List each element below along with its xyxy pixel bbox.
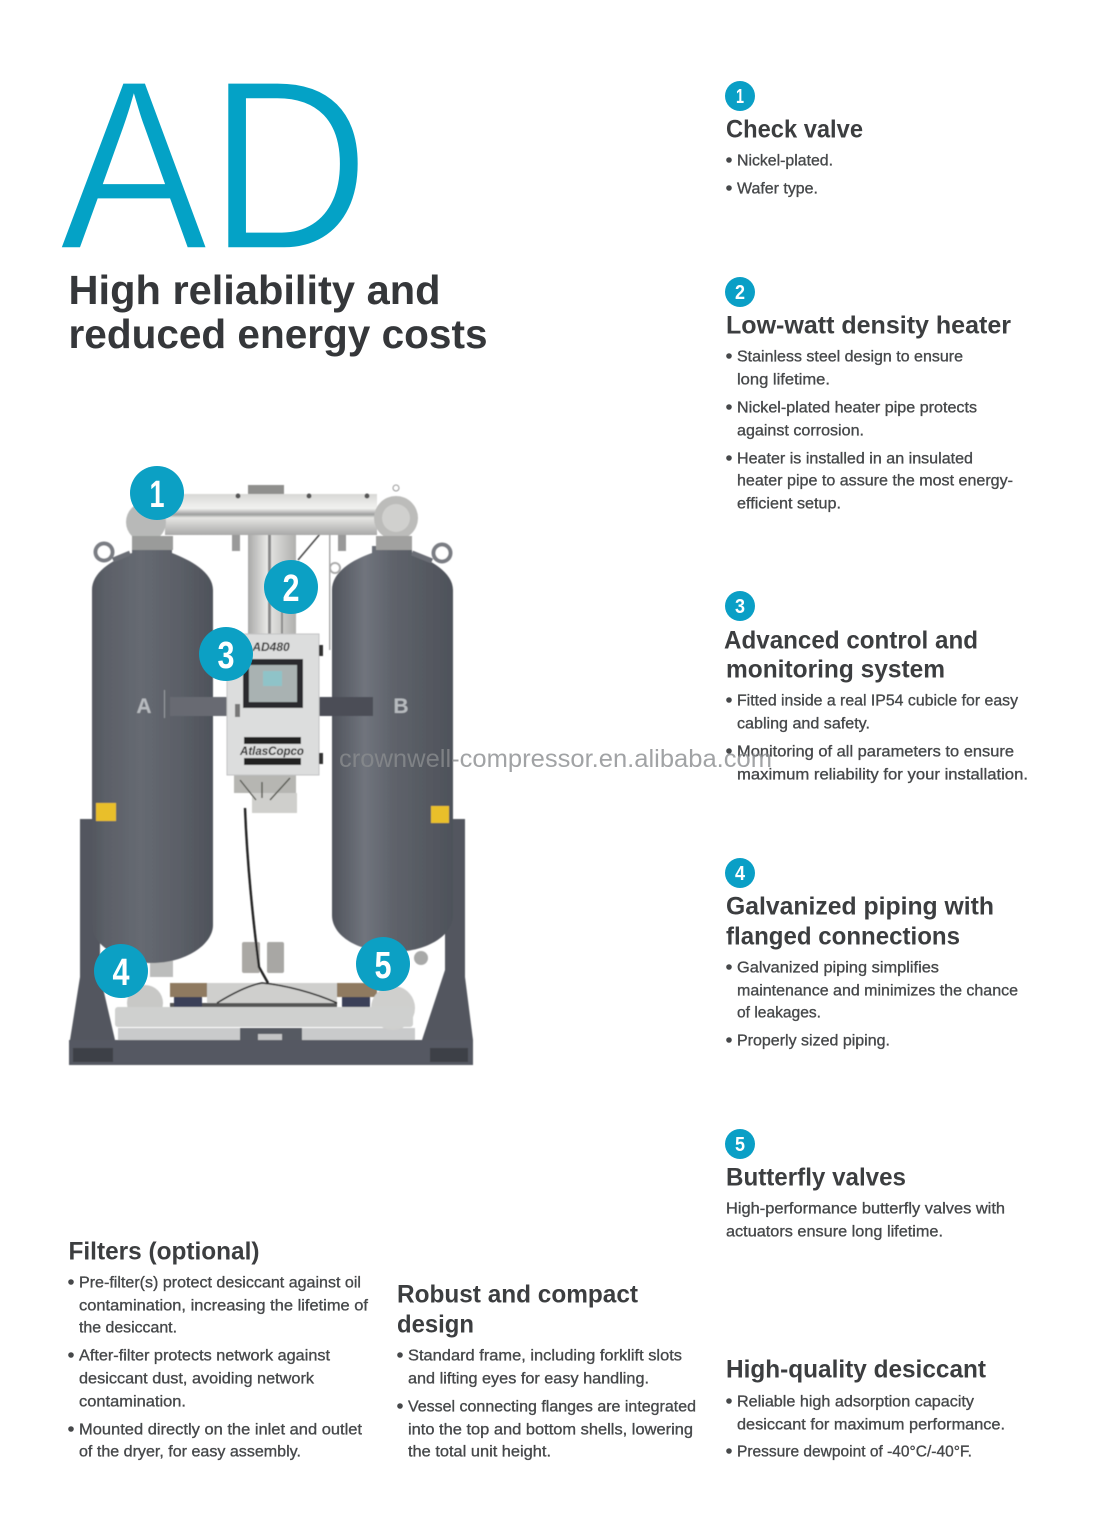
- bullet list: Pre-filter(s) protect desiccant against oil: [79, 1275, 361, 1292]
- description: actuators ensure long lifetime.: [726, 1224, 943, 1241]
- bullet list: heater pipe to assure the most energy-: [737, 473, 1013, 490]
- feature 1: check valve: [725, 81, 863, 198]
- bullet list: Stainless steel design to ensure: [737, 349, 963, 366]
- badge 2: [725, 277, 755, 307]
- bullet list: maintenance and minimizes the chance: [737, 983, 1018, 1000]
- badge 1: 1: [736, 86, 744, 108]
- bullet list: the desiccant.: [79, 1320, 177, 1337]
- bullet list: Properly sized piping.: [737, 1033, 890, 1050]
- bullet list: long lifetime.: [737, 372, 830, 389]
- bullet list: Reliable high adsorption capacity: [737, 1394, 974, 1411]
- bullet list: and lifting eyes for easy handling.: [408, 1371, 649, 1388]
- control cubicle: [227, 634, 323, 775]
- main heading: High reliability and: [68, 267, 440, 313]
- watermark: crownwell-compressor.en.alibaba.com: [339, 745, 772, 773]
- bullet list: [726, 693, 1028, 784]
- bullet list: the total unit height.: [408, 1444, 551, 1461]
- control cubicle: AD480: [251, 640, 290, 654]
- bullet list: against corrosion.: [737, 423, 864, 440]
- badge 5: 5: [735, 1134, 745, 1156]
- bullet list: contamination.: [79, 1394, 186, 1411]
- tank A: A: [136, 695, 152, 718]
- bullet list: Monitoring of all parameters to ensure: [737, 744, 1014, 761]
- control cubicle: AtlasCopco: [239, 746, 304, 758]
- heading: monitoring system: [726, 656, 945, 684]
- heading: Check valve: [726, 116, 863, 144]
- panel: high-quality desiccant: [726, 1356, 1005, 1461]
- bullet list: Fitted inside a real IP54 cubicle for easy: [737, 693, 1018, 710]
- callout 2: 2: [282, 568, 300, 610]
- bullet list: [726, 1394, 1005, 1461]
- heading: design: [397, 1310, 474, 1338]
- callout 1: [130, 466, 184, 520]
- panel: robust and compact design: [397, 1280, 696, 1461]
- tie brackets: [170, 697, 373, 716]
- bullet list: of the dryer, for easy assembly.: [79, 1444, 301, 1461]
- bullet list: Heater is installed in an insulated: [737, 451, 973, 468]
- callout 3: 3: [218, 635, 234, 677]
- main heading: [68, 267, 488, 357]
- bullet list: Vessel connecting flanges are integrated: [408, 1399, 696, 1416]
- badge 3: [725, 591, 755, 621]
- main heading: reduced energy costs: [68, 311, 488, 357]
- bullet list: Nickel-plated heater pipe protects: [737, 400, 977, 417]
- heading: Advanced control and: [724, 626, 978, 654]
- badge 4: [725, 858, 755, 888]
- panel: filters (optional): [68, 1238, 369, 1461]
- description: [726, 1201, 1005, 1241]
- heading: Robust and compact: [397, 1280, 639, 1308]
- heading: Low-watt density heater: [726, 312, 1011, 340]
- bullet list: Galvanized piping simplifies: [737, 960, 939, 977]
- bullet list: cabling and safety.: [737, 716, 870, 733]
- bottom piping: [115, 942, 415, 1030]
- bullet list: [726, 153, 833, 198]
- callout 5: 5: [374, 945, 392, 987]
- bullet list: desiccant dust, avoiding network: [79, 1371, 314, 1388]
- heading: flanged connections: [726, 922, 960, 950]
- heading: Galvanized piping with: [726, 892, 994, 920]
- bullet list: Standard frame, including forklift slots: [408, 1348, 682, 1365]
- bullet list: [726, 960, 1018, 1050]
- vertical pipes: [232, 530, 346, 650]
- feature 3: advanced control and monitoring system: [724, 591, 1028, 784]
- callout 1: 1: [150, 474, 164, 516]
- feature 2: low-watt density heater: [725, 277, 1013, 513]
- bullet list: After-filter protects network against: [79, 1348, 331, 1365]
- bullet list: Wafer type.: [737, 181, 818, 198]
- valve block under cubicle: [234, 775, 297, 813]
- feature 4: galvanized piping: [725, 858, 1018, 1050]
- bullet list: desiccant for maximum performance.: [737, 1417, 1005, 1434]
- bullet list: [726, 349, 1013, 513]
- tank B: B: [393, 695, 409, 718]
- heading: High-quality desiccant: [726, 1356, 987, 1384]
- heading: Butterfly valves: [726, 1164, 906, 1192]
- tank A: [92, 544, 213, 977]
- heading: [397, 1280, 639, 1338]
- callout 4: 4: [112, 952, 130, 994]
- bullet list: [68, 1275, 369, 1461]
- callout 5: [356, 937, 410, 991]
- badge 3: 3: [735, 596, 745, 618]
- feature 5: butterfly valves: [725, 1129, 1005, 1241]
- bullet list: Nickel-plated.: [737, 153, 833, 170]
- heading: Filters (optional): [68, 1238, 260, 1266]
- bullet list: efficient setup.: [737, 496, 841, 513]
- bullet list: maximum reliability for your installation.: [737, 767, 1028, 784]
- bullet list: into the top and bottom shells, lowering: [408, 1422, 693, 1439]
- bullet list: Mounted directly on the inlet and outlet: [79, 1422, 363, 1439]
- badge 2: 2: [735, 282, 745, 304]
- badge 5: [725, 1129, 755, 1159]
- bullet list: contamination, increasing the lifetime of: [79, 1298, 369, 1315]
- bullet list: of leakages.: [737, 1005, 821, 1022]
- control cubicle cable: [245, 808, 268, 983]
- product illustration: AD dryer: [69, 466, 473, 1065]
- frame legs and base: [69, 819, 473, 1065]
- callout 4: [94, 944, 148, 998]
- callout 2: [264, 560, 318, 614]
- large AD title: AD: [59, 30, 370, 301]
- bullet list: [397, 1348, 696, 1461]
- heading: [726, 892, 994, 950]
- bullet list: Pressure dewpoint of -40°C/-40°F.: [737, 1444, 972, 1461]
- tank B: [332, 544, 453, 965]
- description: High-performance butterfly valves with: [726, 1201, 1005, 1218]
- top pipe: [126, 485, 418, 550]
- badge 4: 4: [735, 863, 746, 885]
- callout 3: [199, 627, 253, 681]
- heading: [724, 626, 978, 684]
